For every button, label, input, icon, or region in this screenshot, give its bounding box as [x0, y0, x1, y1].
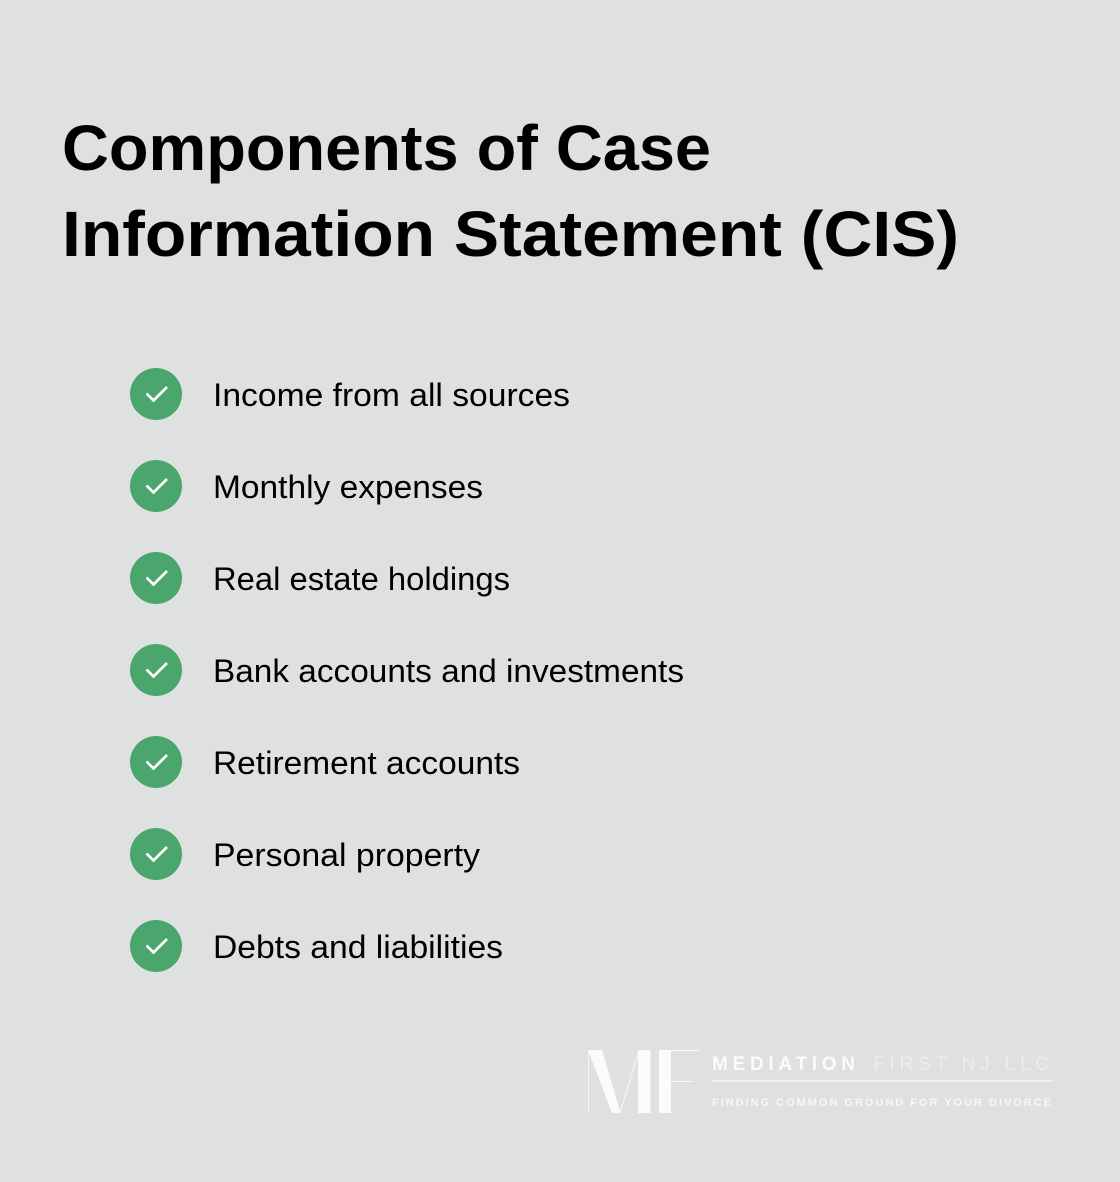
item: bank accounts — [130, 644, 684, 696]
item: monthly expenses: Monthly expenses — [213, 469, 483, 505]
item: debts — [130, 920, 503, 972]
logo wordmark: FINDING COMMON GROUND FOR YOUR DIVORCE — [712, 1097, 1051, 1109]
title: Components of Case — [62, 112, 711, 184]
item: debts: Debts and liabilities — [213, 929, 503, 965]
logo wordmark — [712, 1054, 1053, 1109]
item: real estate: Real estate holdings — [213, 561, 510, 597]
item: monthly expenses — [130, 460, 483, 512]
item: retirement: Retirement accounts — [213, 745, 520, 781]
logo wordmark: FIRST NJ LLC — [873, 1054, 1049, 1075]
logo mark: MF monogram — [588, 1050, 699, 1113]
checklist — [130, 368, 684, 972]
item: income: Income from all sources — [213, 377, 570, 413]
item: income — [130, 368, 570, 420]
item: real estate — [130, 552, 510, 604]
item: personal property — [130, 828, 480, 880]
logo wordmark: MEDIATION — [712, 1054, 855, 1075]
title: Information Statement (CIS) — [62, 198, 959, 270]
title — [62, 112, 959, 270]
item: personal property: Personal property — [213, 837, 480, 873]
item: retirement — [130, 736, 520, 788]
logo — [588, 1050, 1053, 1113]
item: bank accounts: Bank accounts and investments — [213, 653, 684, 689]
